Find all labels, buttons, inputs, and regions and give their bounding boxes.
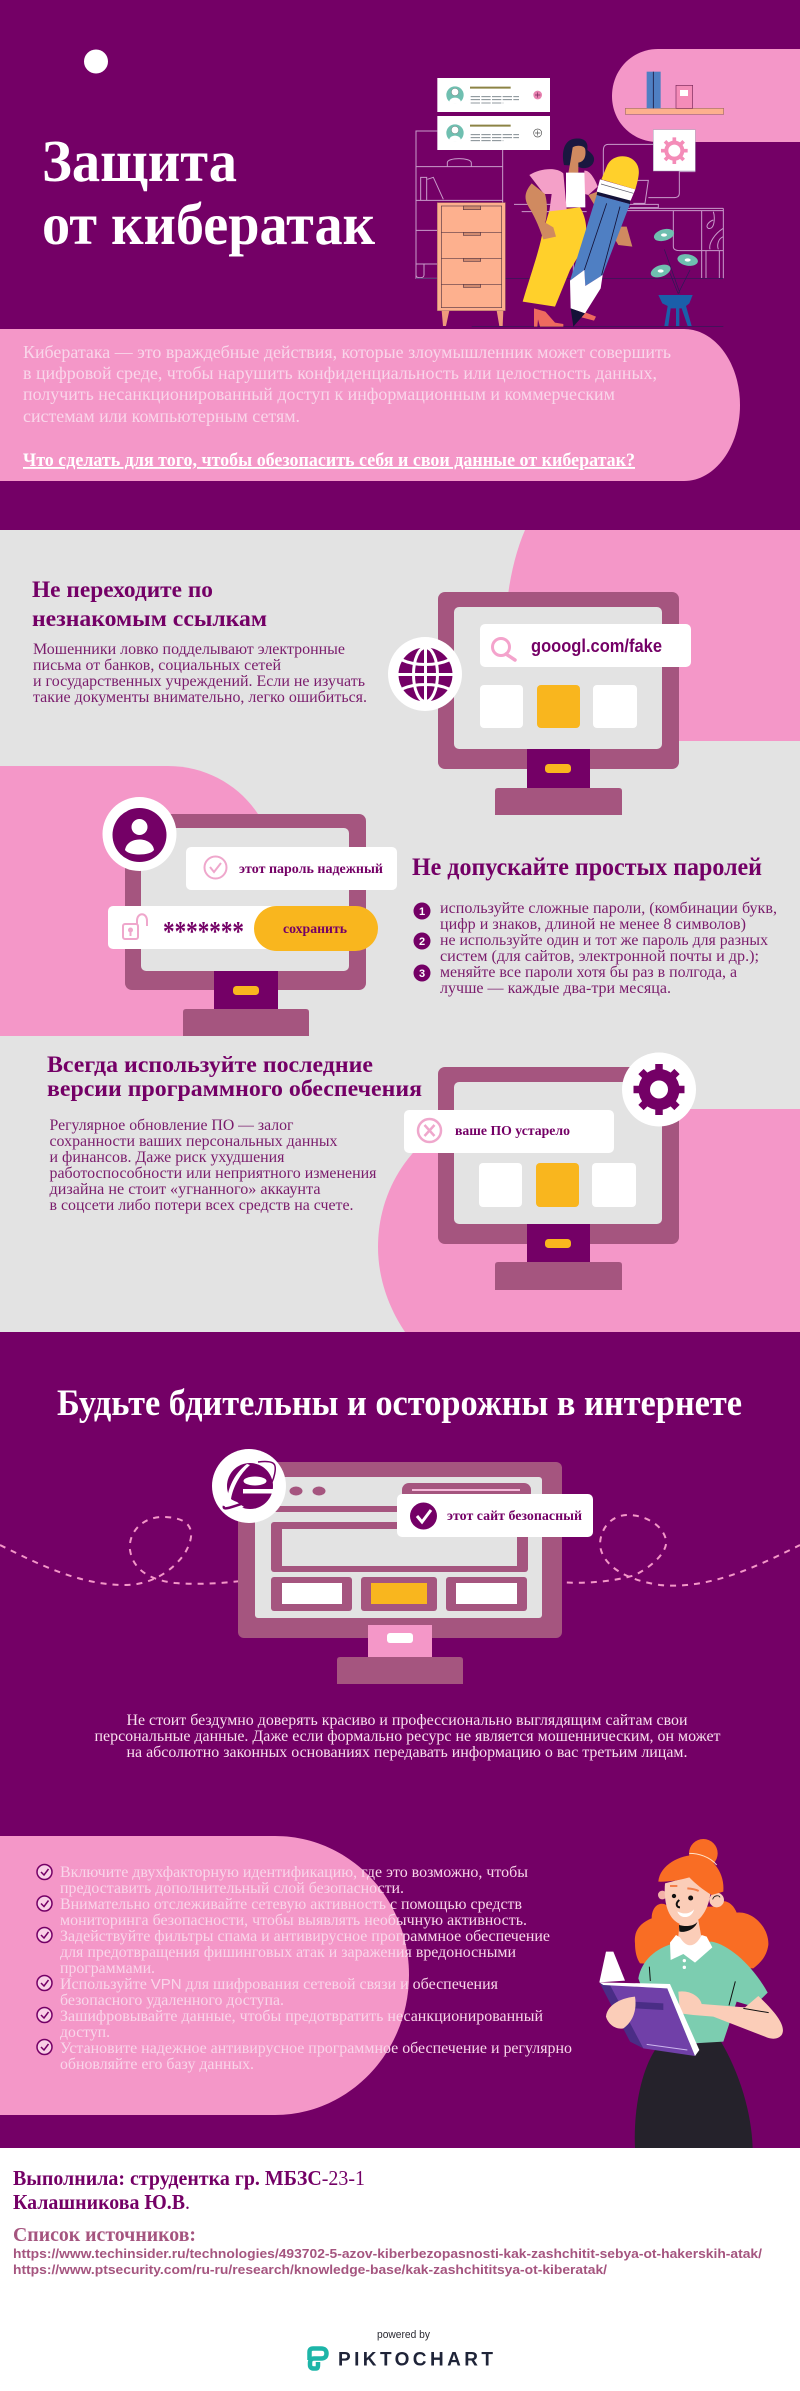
password ok label xyxy=(186,847,397,890)
safe site label xyxy=(397,1494,593,1537)
ground lines xyxy=(416,278,723,327)
recommendation lines: Установите надежное антивирусное программное обеспечение и регулярно xyxy=(60,2040,572,2057)
text: updates xyxy=(50,1117,377,1214)
recommendation lines: Внимательно отслеживайте сетевую активность с помощью средств xyxy=(60,1896,522,1913)
author credit: Калашникова Ю.В. xyxy=(13,2190,190,2214)
recommendation lines xyxy=(60,1864,572,2073)
text: updates: дизайна не стоит «угнанного» аккаунта xyxy=(50,1181,320,1198)
list: recommendations xyxy=(37,1864,572,2073)
list: passwords: 2 xyxy=(419,936,425,948)
text: links: письма от банков, социальных сетей xyxy=(33,657,281,674)
intro text: Кибератака — это враждебные действия, которые злоумышленник может совершить xyxy=(23,342,671,362)
pink shape left xyxy=(0,766,276,1036)
intro text: системам или компьютерным сетям. xyxy=(23,406,300,426)
author credit: Выполнила: струдентка гр. МБЗС-23-1 xyxy=(13,2166,365,2190)
recommendation lines: Зашифровывайте данные, чтобы предотвратить несанкционированный xyxy=(60,2008,543,2025)
intro question: Что сделать для того, чтобы обезопасить себя и свои данные от кибератак? xyxy=(23,451,635,471)
sources links: https://www.techinsider.ru/technologies/493702-5-azov-kiberbezopasnosti-kak-zashchitit-sebya-ot-hakerskih-atak/ xyxy=(13,2247,763,2261)
potted plant xyxy=(649,227,699,326)
text: links: такие документы внимательно, легко ошибиться. xyxy=(33,689,367,706)
text: links: Мошенники ловко подделывают электронные xyxy=(33,641,345,658)
text: updates: Регулярное обновление ПО — залог xyxy=(50,1117,294,1134)
password ok label: этот пароль надежный xyxy=(239,862,383,877)
list: passwords: не используйте один и тот же пароль для разных xyxy=(440,932,768,949)
dashed path right xyxy=(543,1515,800,1586)
recommendation lines: для предотвращения фишинговых атак и заражения вредоносными xyxy=(60,1944,516,1961)
icon: gear xyxy=(622,1052,696,1126)
illustration: woman with pencil in an office xyxy=(416,72,724,327)
heading: vigilance: Будьте бдительны и осторожны в интернете xyxy=(57,1383,742,1424)
heading: updates: Всегда используйте последние xyxy=(47,1052,373,1077)
outdated label xyxy=(404,1110,614,1153)
decorative white dot xyxy=(84,50,108,74)
panel: tips background xyxy=(0,530,800,1332)
text: links xyxy=(33,641,367,706)
panel: intro pink pill xyxy=(0,329,740,481)
recommendation lines: доступ. xyxy=(60,2024,110,2041)
panel: footer xyxy=(0,2148,800,2391)
recommendation lines: обновляйте его базу данных. xyxy=(60,2056,254,2073)
logo: Piktochart: PIKTOCHART xyxy=(338,2350,493,2370)
recommendation lines: мониторинга безопасности, чтобы выявлять необычную активность. xyxy=(60,1912,527,1929)
text: updates: работоспособности или неприятного изменения xyxy=(50,1165,377,1182)
pink shape top right xyxy=(505,530,800,741)
giant pencil xyxy=(570,156,639,327)
recommendation lines: программами. xyxy=(60,1960,155,1977)
monitor 1 with fake link xyxy=(388,592,691,815)
intro text xyxy=(23,342,671,426)
text: updates: и финансов. Даже риск ухудшения xyxy=(50,1149,285,1166)
password field: сохранить xyxy=(283,922,348,937)
list: passwords: систем (для сайтов, электронной почты и др.); xyxy=(440,948,759,965)
recommendation lines: Включите двухфакторную идентификацию, где это возможно, чтобы xyxy=(60,1864,528,1881)
heading: updates: версии программного обеспечения xyxy=(47,1076,422,1101)
list: passwords: цифр и знаков, длиной не менее 8 символов) xyxy=(440,916,746,933)
list: passwords: лучше — каждые два-три месяца. xyxy=(440,980,671,997)
panel: vigilance background xyxy=(0,1332,800,2148)
text: vigilance xyxy=(94,1712,721,1761)
woman figure xyxy=(523,139,632,327)
text: vigilance: персональные данные. Даже если формально ресурс не является мошенническим, он может xyxy=(94,1728,721,1745)
heading: passwords: Не допускайте простых паролей xyxy=(412,854,762,881)
recommendation lines: Используйте VPN для шифрования сетевой связи и обеспечения xyxy=(60,1976,499,1993)
text: updates: в соцсети либо потери всех средств на счете. xyxy=(50,1197,354,1214)
search box xyxy=(480,624,691,667)
notification cards xyxy=(437,78,550,150)
intro text: получить несанкционированный доступ к информационным и коммерческим xyxy=(23,384,615,404)
outdated label: ваше ПО устарело xyxy=(455,1124,570,1139)
password field xyxy=(108,906,378,951)
password field: ******* xyxy=(163,917,244,948)
check icons xyxy=(37,1864,52,2054)
search box: gooogl.com/fake xyxy=(531,636,662,656)
illustration: red-haired girl reading a book xyxy=(599,1839,783,2148)
author credit xyxy=(13,2166,365,2214)
safe site label: этот сайт безопасный xyxy=(447,1508,582,1523)
wall shelf with books xyxy=(625,72,724,114)
panel: hero background xyxy=(0,0,800,530)
sources links xyxy=(13,2247,763,2277)
recommendation lines: Задействуйте фильтры спама и антивирусное программное обеспечение xyxy=(60,1928,550,1945)
panel: recommendations pill xyxy=(0,1836,409,2115)
monitor 4 with website xyxy=(212,1449,593,1684)
icon: globe xyxy=(388,637,462,711)
heading: updates xyxy=(47,1052,422,1101)
recommendation lines: предоставить дополнительный слой безопасности. xyxy=(60,1880,404,1897)
title: Защита xyxy=(42,128,237,194)
powered by label: powered by xyxy=(377,2329,430,2341)
intro text: в цифровой среде, чтобы нарушить конфиденциальность или целостность данных, xyxy=(23,363,657,383)
icon: user xyxy=(102,797,176,871)
sources heading: Список источников: xyxy=(13,2224,196,2246)
text: vigilance: на абсолютно законных основаниях передавать информацию о вас третьим лицам. xyxy=(126,1744,688,1761)
sources links: https://www.ptsecurity.com/ru-ru/research/knowledge-base/kak-zashchititsya-ot-kiberatak/ xyxy=(13,2263,608,2277)
pink pill behind shelf xyxy=(612,49,800,142)
text: vigilance: Не стоит бездумно доверять красиво и профессионально выглядящим сайтам свои xyxy=(126,1712,688,1729)
list: passwords: меняйте все пароли хотя бы раз в полгода, а xyxy=(440,964,737,981)
text: updates: сохранности ваших персональных данных xyxy=(50,1133,338,1150)
dashed path left xyxy=(0,1517,250,1585)
list: passwords: 1 xyxy=(419,906,425,918)
heading: links: незнакомым ссылкам xyxy=(32,606,267,631)
pink shape right xyxy=(378,1109,800,1332)
heading: links: Не переходите по xyxy=(32,577,213,602)
list: passwords xyxy=(414,900,777,997)
heading: links xyxy=(32,577,267,631)
title xyxy=(42,128,375,257)
title: от кибератак xyxy=(42,191,375,257)
line art furniture xyxy=(416,131,723,278)
gear card xyxy=(653,130,695,171)
monitor 3 with update warning xyxy=(404,1052,696,1290)
drawer cabinet xyxy=(437,203,505,326)
monitor 2 with password xyxy=(102,797,397,1036)
icon: browser e xyxy=(212,1449,286,1523)
text: links: и государственных учреждений. Если не изучать xyxy=(33,673,365,690)
list: passwords: 3 xyxy=(419,968,425,980)
recommendation lines: безопасного удаленного доступа. xyxy=(60,1992,284,2009)
list: passwords: используйте сложные пароли, (комбинации букв, xyxy=(440,900,777,917)
